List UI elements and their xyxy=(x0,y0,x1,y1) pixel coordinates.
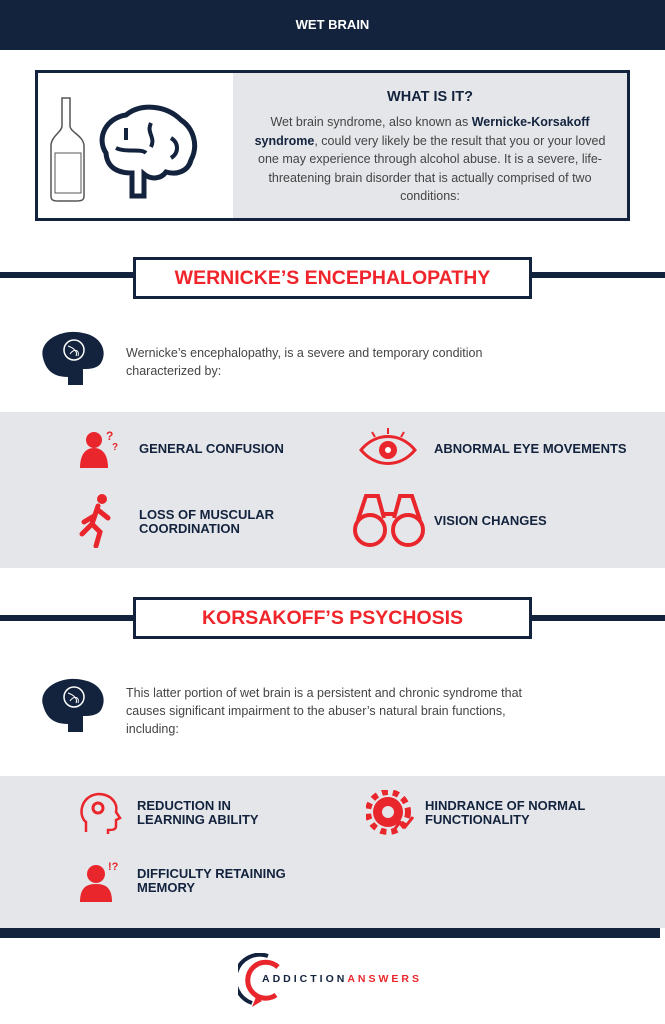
icon: learning head xyxy=(80,792,122,834)
icon: memory head xyxy=(80,861,119,902)
icon: binoculars xyxy=(353,494,425,547)
logo xyxy=(238,953,422,1007)
label: difficulty retaining memory: DIFFICULTY RETAINING xyxy=(137,866,286,881)
icon: running xyxy=(80,494,110,548)
panel: korsakoff symptoms xyxy=(0,776,665,928)
header bar xyxy=(0,0,665,50)
header bar: WET BRAIN xyxy=(296,17,369,32)
label: difficulty retaining memory: MEMORY xyxy=(137,880,195,895)
panel: what is it xyxy=(35,70,630,221)
icon: gear xyxy=(366,790,414,835)
label: loss of coordination xyxy=(139,507,274,536)
icon: confusion: ? xyxy=(106,429,113,443)
icon: logo mark xyxy=(238,953,280,1007)
footer bar xyxy=(0,928,660,938)
divider line 1 xyxy=(0,272,665,278)
heading: korsakoff xyxy=(133,597,532,639)
icon: brain head 1 xyxy=(42,332,104,385)
label: reduction in learning: REDUCTION IN xyxy=(137,798,231,813)
icon: confusion: ? xyxy=(112,442,118,453)
text: korsakoff intro: This latter portion of wet brain is a persistent and chronic syndrome that causes significant impairment to the abuser’s natural brain functions, including: xyxy=(126,686,522,736)
label: hindrance xyxy=(425,798,585,827)
icon: brain head 2 xyxy=(42,678,104,732)
heading: wernicke's: WERNICKE’S ENCEPHALOPATHY xyxy=(175,267,490,289)
label: general confusion: GENERAL CONFUSION xyxy=(139,441,284,456)
text: wernicke intro: Wernicke’s encephalopathy, is a severe and temporary condition characterized by: xyxy=(126,346,482,378)
heading: korsakoff: KORSAKOFF’S PSYCHOSIS xyxy=(202,607,463,629)
text: definition: Wet brain syndrome, also known as Wernicke-Korsakoff syndrome, could very likely be the result that you or your loved one may experience through alcohol abuse. It is a severe, life-threatening brain disorder that is actually comprised of two conditions: xyxy=(255,115,605,203)
label: loss of coordination: COORDINATION xyxy=(139,521,240,536)
label: hindrance: HINDRANCE OF NORMAL xyxy=(425,798,585,813)
icon: eye xyxy=(359,428,417,465)
divider line 2 xyxy=(0,615,665,621)
icon: bottle and brain xyxy=(50,97,198,202)
label: difficulty retaining memory xyxy=(137,866,286,895)
grey text area xyxy=(233,73,627,218)
panel: wernicke symptoms xyxy=(0,412,665,568)
label: reduction in learning xyxy=(137,798,259,827)
label: hindrance: FUNCTIONALITY xyxy=(425,812,530,827)
label: reduction in learning: LEARNING ABILITY xyxy=(137,812,259,827)
icon: memory head: !? xyxy=(108,861,119,873)
label: vision changes: VISION CHANGES xyxy=(434,513,547,528)
label: abnormal eye movements: ABNORMAL EYE MOVEMENTS xyxy=(434,441,627,456)
label: loss of coordination: LOSS OF MUSCULAR xyxy=(139,507,274,522)
heading: wernicke's xyxy=(133,257,532,299)
heading: what is it: WHAT IS IT? xyxy=(387,89,473,105)
icon: confusion xyxy=(80,429,118,468)
text: brand: ADDICTIONANSWERS xyxy=(262,973,422,985)
